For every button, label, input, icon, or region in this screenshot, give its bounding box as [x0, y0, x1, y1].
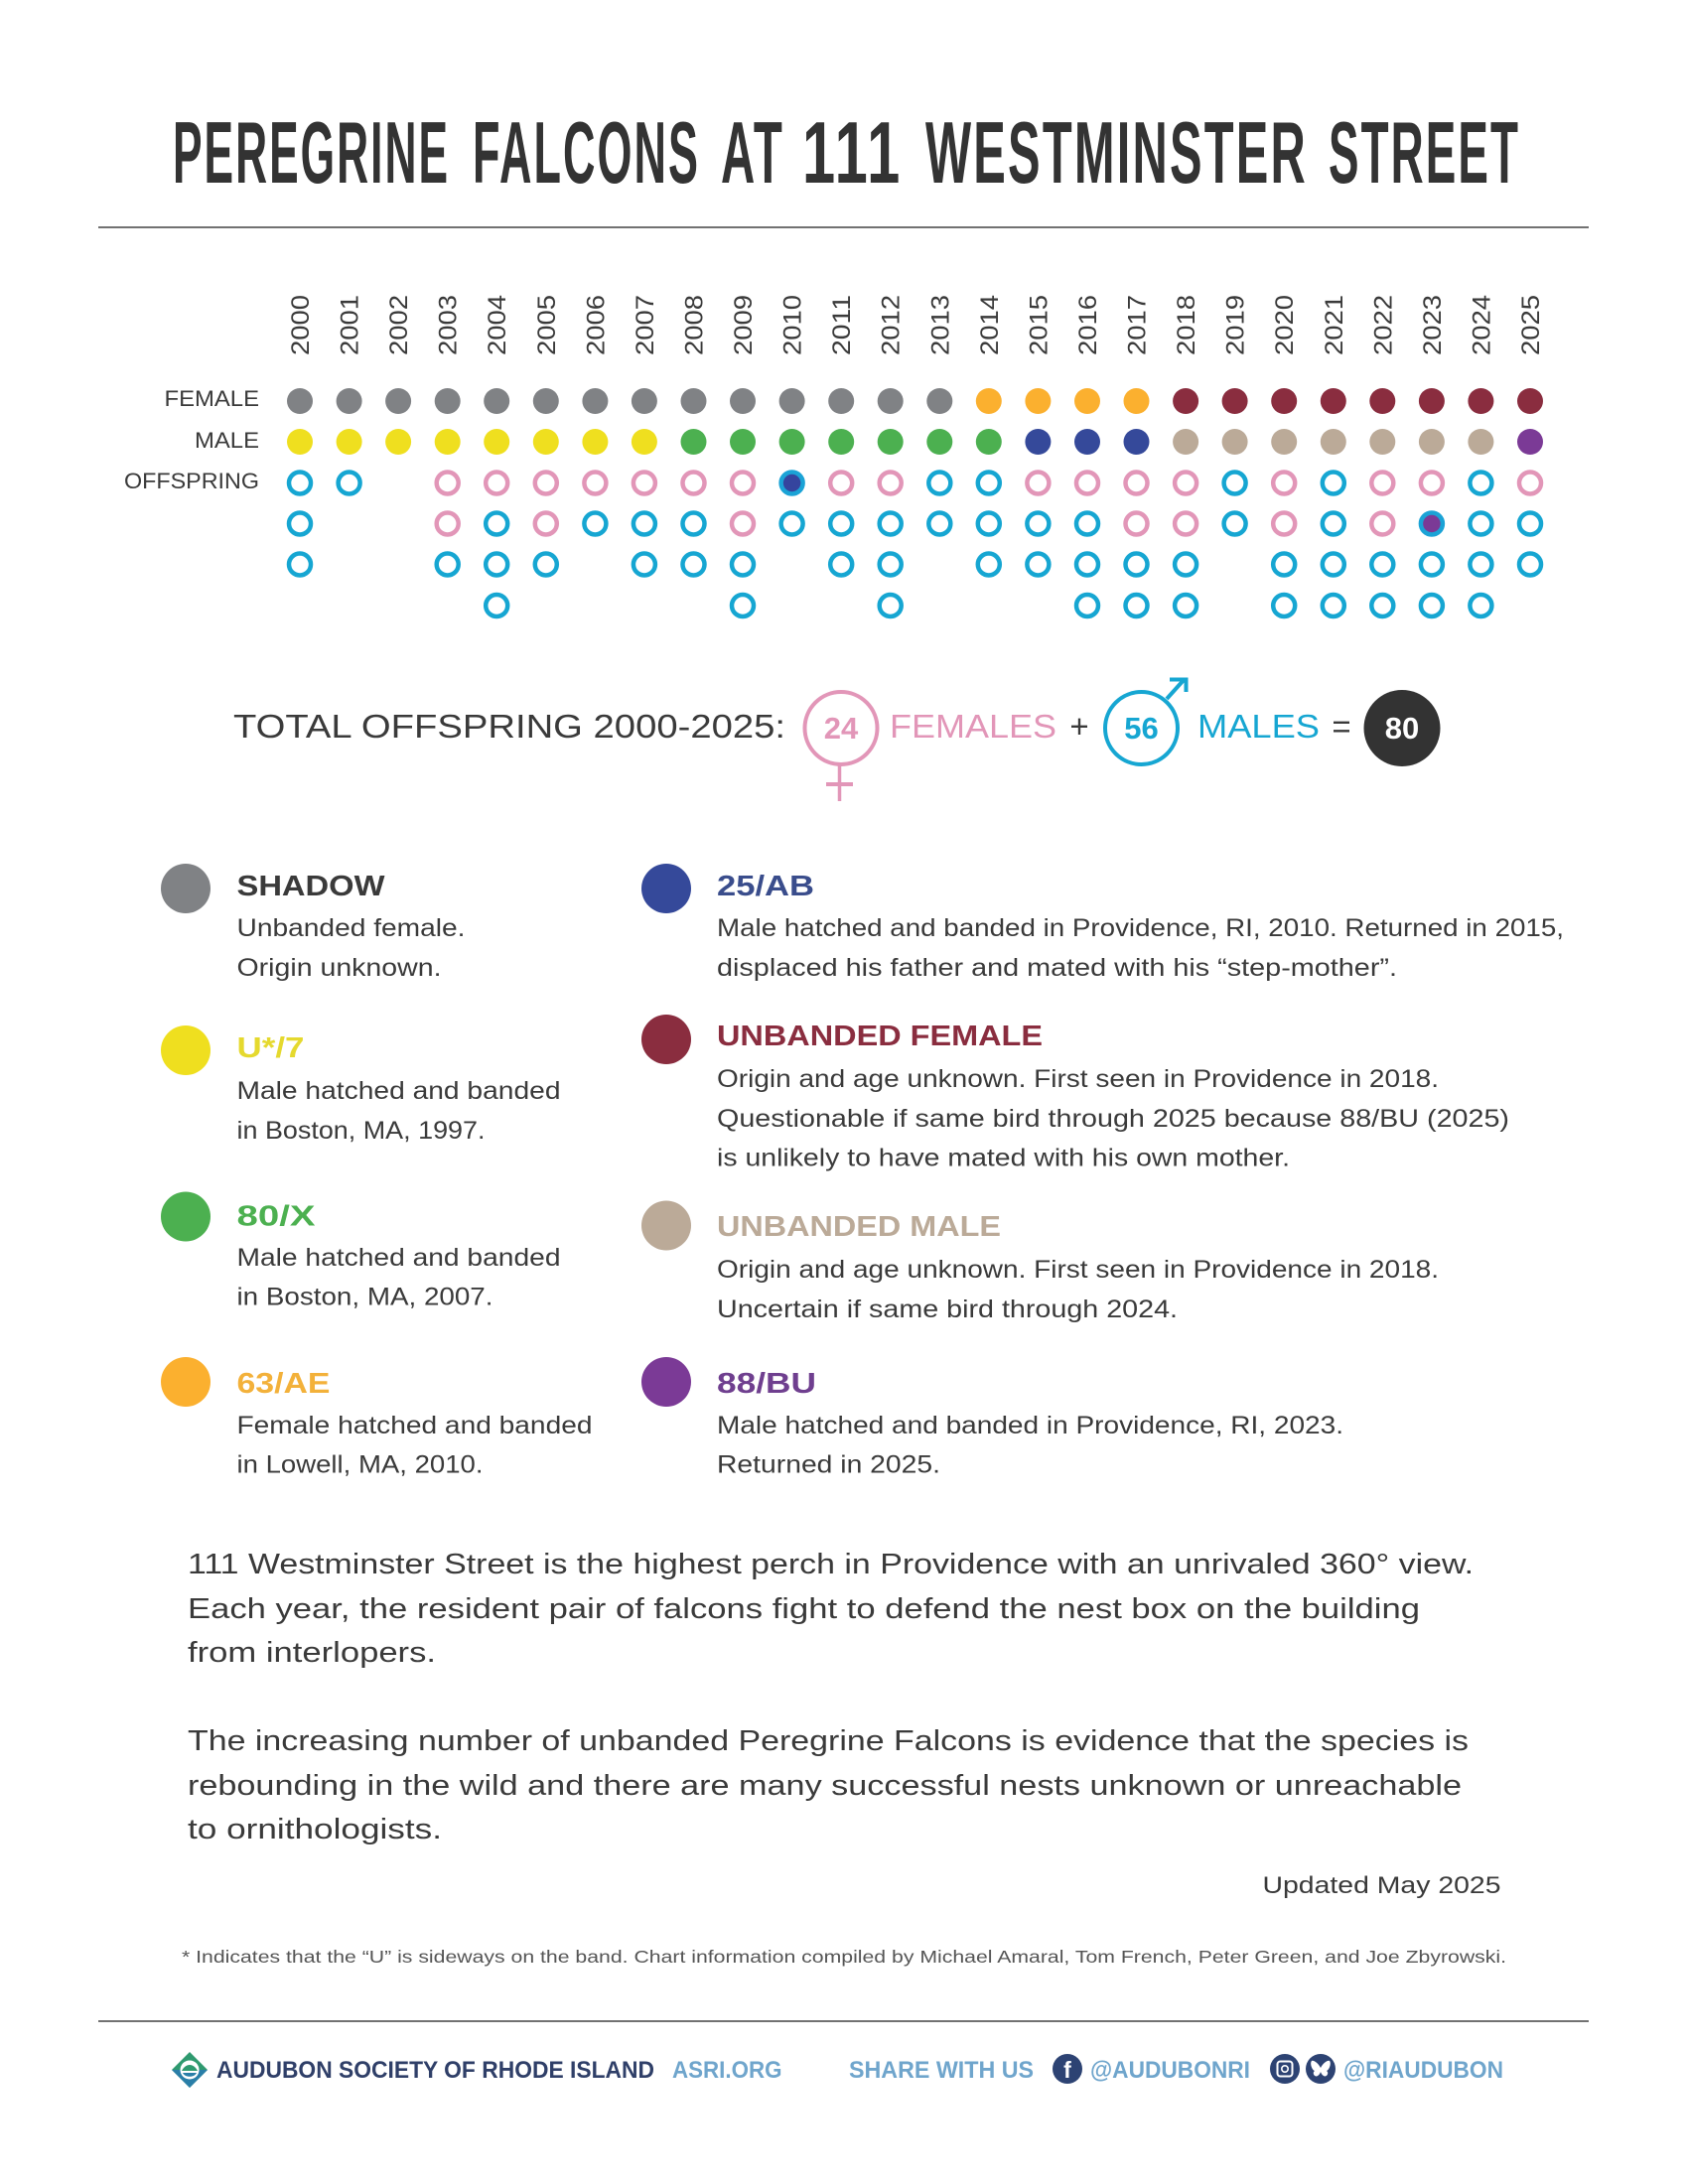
- year axis labels: 2025: [1517, 295, 1545, 355]
- legend: 80/X: [161, 1191, 560, 1310]
- legend: 88/BU: [641, 1357, 1343, 1479]
- title: FALCONS: [473, 103, 700, 202]
- year axis labels: 2016: [1074, 295, 1102, 355]
- legend: 88/BU: Returned in 2025.: [717, 1451, 940, 1479]
- total badge: 80: 80: [1385, 711, 1419, 746]
- legend: 63/AE: 63/AE: [236, 1368, 330, 1400]
- legend: Shadow: [161, 864, 465, 982]
- legend: U*/7: [161, 1025, 560, 1145]
- legend: 25/AB: Male hatched and banded in Providence, RI, 2010. Returned in 2015,: [717, 914, 1564, 942]
- year axis labels: 2005: [533, 295, 561, 355]
- legend: unbanded female: Origin and age unknown. First seen in Providence in 2018.: [717, 1065, 1439, 1093]
- year axis labels: 2012: [878, 295, 906, 355]
- total badge: 80: [1364, 690, 1440, 766]
- row label: male: MALE: [195, 428, 259, 453]
- legend: Shadow: Unbanded female.: [236, 914, 465, 942]
- year axis labels: 2002: [385, 295, 413, 355]
- legend: Shadow: SHADOW: [236, 871, 385, 902]
- legend: 25/AB: 25/AB: [717, 871, 814, 902]
- legend: unbanded female: Questionable if same bird through 2025 because 88/BU (2025): [717, 1105, 1509, 1133]
- title: AT: [721, 103, 784, 202]
- title: STREET: [1329, 103, 1520, 202]
- year axis labels: 2004: [484, 295, 511, 355]
- total label: TOTAL OFFSPRING 2000-2025:: [233, 708, 785, 745]
- row: resident males: [287, 429, 1543, 455]
- chart: nesting pairs and offspring by year: [124, 295, 1545, 616]
- year axis labels: 2017: [1124, 295, 1152, 355]
- title: [173, 103, 1520, 202]
- year axis labels: 2001: [337, 295, 364, 355]
- legend: unbanded male: UNBANDED MALE: [717, 1211, 1001, 1243]
- equals sign: =: [1332, 708, 1351, 745]
- legend: left column: [161, 864, 592, 1479]
- legend: 63/AE: [161, 1357, 592, 1479]
- legend: 63/AE: in Lowell, MA, 2010.: [236, 1451, 483, 1479]
- social handle: @RIAUDUBON: [1343, 2057, 1503, 2084]
- text block: unbanded falcons: to ornithologists.: [188, 1814, 442, 1845]
- icon: female symbol with 24: 24: [824, 711, 859, 746]
- share label: SHARE WITH US: [849, 2057, 1034, 2084]
- legend: unbanded female: [641, 1015, 1509, 1171]
- organization name: AUDUBON SOCIETY OF RHODE ISLAND: [216, 2057, 654, 2084]
- legend: unbanded female: is unlikely to have mated with his own mother.: [717, 1144, 1290, 1171]
- year axis labels: 2009: [730, 295, 758, 355]
- offspring row 2: [289, 512, 1541, 534]
- legend: U*/7: in Boston, MA, 1997.: [236, 1117, 485, 1145]
- legend: 88/BU: 88/BU: [717, 1368, 816, 1400]
- year axis labels: 2023: [1419, 295, 1447, 355]
- legend: 80/X: Male hatched and banded: [236, 1244, 560, 1272]
- year axis labels: 2003: [435, 295, 463, 355]
- year axis labels: 2018: [1173, 295, 1200, 355]
- title: PEREGRINE: [173, 103, 450, 202]
- legend: 25/AB: [641, 864, 1564, 982]
- text block: about the site: Each year, the resident pair of falcons fight to defend the nest box on the building: [188, 1593, 1420, 1625]
- facebook handle: @AUDUBONRI: [1090, 2057, 1250, 2084]
- offspring row 4: [486, 595, 1491, 616]
- legend: Shadow: Origin unknown.: [236, 954, 441, 982]
- year axis labels: 2006: [582, 295, 610, 355]
- offspring row 1: [289, 473, 1541, 494]
- footer: [172, 2052, 1503, 2088]
- legend: U*/7: U*/7: [236, 1032, 304, 1064]
- icon: male symbol with 56: 56: [1124, 711, 1159, 746]
- year axis labels: 2008: [681, 295, 709, 355]
- year axis labels: 2024: [1468, 295, 1495, 355]
- offspring row 3: [289, 554, 1541, 576]
- text block: unbanded falcons: [188, 1725, 1469, 1845]
- text block: about the site: from interlopers.: [188, 1637, 436, 1669]
- title: WESTMINSTER: [925, 103, 1308, 202]
- text block: about the site: [188, 1549, 1474, 1669]
- total offspring equation: [233, 679, 1440, 801]
- row: resident females: [287, 388, 1543, 414]
- footnote: * Indicates that the “U” is sideways on the band. Chart information compiled by Michael Amaral, Tom French, Peter Green, and Joe Zbyrowski.: [182, 1947, 1506, 1967]
- text block: unbanded falcons: The increasing number of unbanded Peregrine Falcons is evidence that the species is: [188, 1725, 1469, 1757]
- year axis labels: 2019: [1222, 295, 1250, 355]
- legend: 88/BU: Male hatched and banded in Providence, RI, 2023.: [717, 1412, 1343, 1439]
- year axis labels: 2020: [1271, 295, 1299, 355]
- year axis labels: 2013: [926, 295, 954, 355]
- legend: unbanded male: Uncertain if same bird through 2024.: [717, 1296, 1178, 1323]
- website: ASRI.ORG: [672, 2057, 782, 2084]
- legend: unbanded male: Origin and age unknown. First seen in Providence in 2018.: [717, 1256, 1439, 1284]
- icon: facebook: f: [1063, 2057, 1071, 2083]
- year axis labels: 2021: [1321, 295, 1348, 355]
- legend: 25/AB: displaced his father and mated with his “step-mother”.: [717, 954, 1397, 982]
- legend: 80/X: in Boston, MA, 2007.: [236, 1283, 492, 1310]
- year axis labels: 2022: [1369, 295, 1397, 355]
- year axis labels: 2007: [632, 295, 659, 355]
- row label: female: FEMALE: [165, 386, 259, 411]
- legend: unbanded male: [641, 1201, 1439, 1323]
- title: 111: [802, 103, 903, 202]
- year axis labels: [287, 295, 1545, 355]
- plus sign: +: [1069, 708, 1089, 745]
- icon: Audubon logo: [172, 2052, 208, 2088]
- text block: about the site: 111 Westminster Street is the highest perch in Providence with an unrivaled 360° view.: [188, 1549, 1474, 1580]
- year axis labels: 2010: [779, 295, 807, 355]
- icon: facebook: [1053, 2054, 1082, 2084]
- text block: unbanded falcons: rebounding in the wild and there are many successful nests unknown or unreachable: [188, 1770, 1462, 1802]
- year axis labels: 2014: [976, 295, 1004, 355]
- row label: offspring: OFFSPRING: [124, 469, 259, 493]
- males label: MALES: [1197, 708, 1320, 745]
- icon: female symbol with 24: [804, 692, 878, 801]
- year axis labels: 2011: [828, 295, 856, 355]
- year axis labels: 2000: [287, 295, 315, 355]
- icon: bluesky: [1306, 2054, 1336, 2084]
- icon: instagram: [1270, 2054, 1300, 2084]
- updated date: Updated May 2025: [1263, 1872, 1501, 1899]
- year axis labels: 2015: [1025, 295, 1053, 355]
- legend: U*/7: Male hatched and banded: [236, 1077, 560, 1105]
- females label: FEMALES: [890, 708, 1056, 745]
- legend: right column: [641, 864, 1564, 1479]
- legend: 80/X: 80/X: [236, 1201, 316, 1233]
- icon: male symbol with 56: [1105, 679, 1186, 764]
- legend: unbanded female: UNBANDED FEMALE: [717, 1021, 1043, 1052]
- legend: 63/AE: Female hatched and banded: [236, 1412, 592, 1439]
